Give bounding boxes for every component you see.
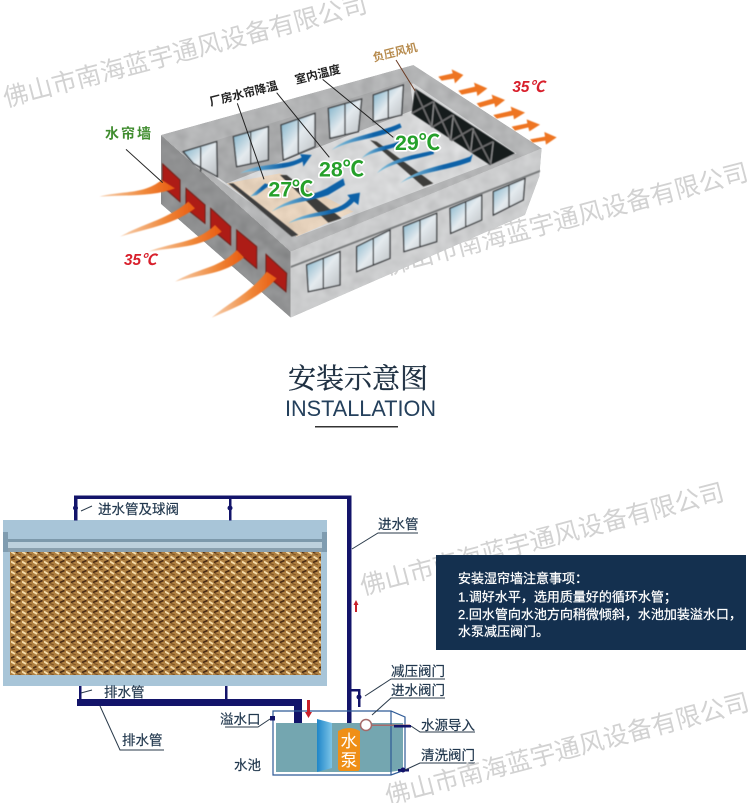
label: overflow: 溢水口 xyxy=(220,712,260,727)
heading: chinese title: 安装示意图 xyxy=(288,363,428,395)
label: water source: 水源导入 xyxy=(421,718,475,733)
building walls and roof xyxy=(161,65,542,318)
label: exhaust fan: 负压风机 xyxy=(371,40,419,65)
inlet and cleaning valves xyxy=(270,716,411,772)
label: cleaning valve: 清洗阀门 xyxy=(421,748,475,763)
orange inflow arrows xyxy=(99,180,277,318)
notes text: 1.调好水平，选用质量好的循环水管； xyxy=(458,590,677,606)
flow arrow: upward xyxy=(354,600,358,612)
building illustration xyxy=(99,40,557,318)
pump: 泵 xyxy=(340,751,358,770)
notes text: 2.回水管向水池方向稍微倾斜，水池加装溢水口， xyxy=(458,607,742,622)
label: inlet temperature: 35℃ xyxy=(124,252,159,269)
notes text xyxy=(458,571,742,639)
label: drain pipe lower xyxy=(100,706,164,750)
label: 29 degrees: 29℃ xyxy=(395,131,440,155)
label: inlet pipe xyxy=(352,517,418,549)
cooling pad wall diagram xyxy=(3,520,327,686)
blue airflow arrows xyxy=(240,123,473,223)
panel: installation notes xyxy=(436,555,746,650)
partition xyxy=(317,719,332,772)
label: outlet temperature: 35℃ xyxy=(512,79,547,96)
exhaust fans xyxy=(412,88,515,165)
label: inlet pipe: 进水管 xyxy=(378,517,418,532)
label: pressure relief valve xyxy=(365,664,445,696)
label: air curtain wall: 水帘墙 xyxy=(105,125,153,141)
label: drain pipe upper xyxy=(81,685,144,700)
label: cleaning valve xyxy=(405,748,475,770)
floor beams xyxy=(280,140,433,223)
label: 28 degrees: 28℃ xyxy=(319,158,364,182)
float valve xyxy=(360,720,410,730)
label: pressure relief valve: 减压阀门 xyxy=(391,664,445,679)
red cooling pads xyxy=(163,164,287,292)
label: factory cooling: 厂房水帘降温 xyxy=(208,78,280,109)
label: drain pipe lower: 排水管 xyxy=(122,733,162,748)
watermark: lower right: 佛山市南海蓝宇通风设备有限公司 xyxy=(357,479,727,601)
beam and wall ledge xyxy=(228,170,540,268)
heading: english title: INSTALLATION xyxy=(285,396,436,421)
water tank xyxy=(270,711,411,775)
pump xyxy=(338,728,360,771)
flow arrow: downward xyxy=(305,700,312,718)
notes text: 安装湿帘墙注意事项： xyxy=(458,571,588,586)
diagram labels xyxy=(81,502,475,773)
water pipes xyxy=(73,496,362,737)
notes text: 水泵减压阀门。 xyxy=(458,624,549,639)
tank outline xyxy=(273,711,405,775)
label: drain pipe upper: 排水管 xyxy=(104,685,144,700)
label: 27 degrees: 27℃ xyxy=(268,178,313,202)
label: inlet valve xyxy=(372,683,445,715)
pump: 水 xyxy=(340,732,358,751)
section heading xyxy=(285,363,436,428)
callout lines xyxy=(126,60,415,183)
tank water xyxy=(276,723,403,772)
windows xyxy=(183,85,525,292)
corrugated pad xyxy=(10,552,321,675)
pad frame xyxy=(3,520,327,686)
label: inlet valve: 进水阀门 xyxy=(391,683,445,698)
label: inlet pipe and ball valve: 进水管及球阀 xyxy=(98,502,179,517)
watermark: middle right: 佛山市南海蓝宇通风设备有限公司 xyxy=(381,159,750,281)
label: tank: 水池 xyxy=(234,758,261,773)
label: indoor temperature: 室内温度 xyxy=(293,62,342,87)
orange outflow arrows xyxy=(438,69,557,145)
